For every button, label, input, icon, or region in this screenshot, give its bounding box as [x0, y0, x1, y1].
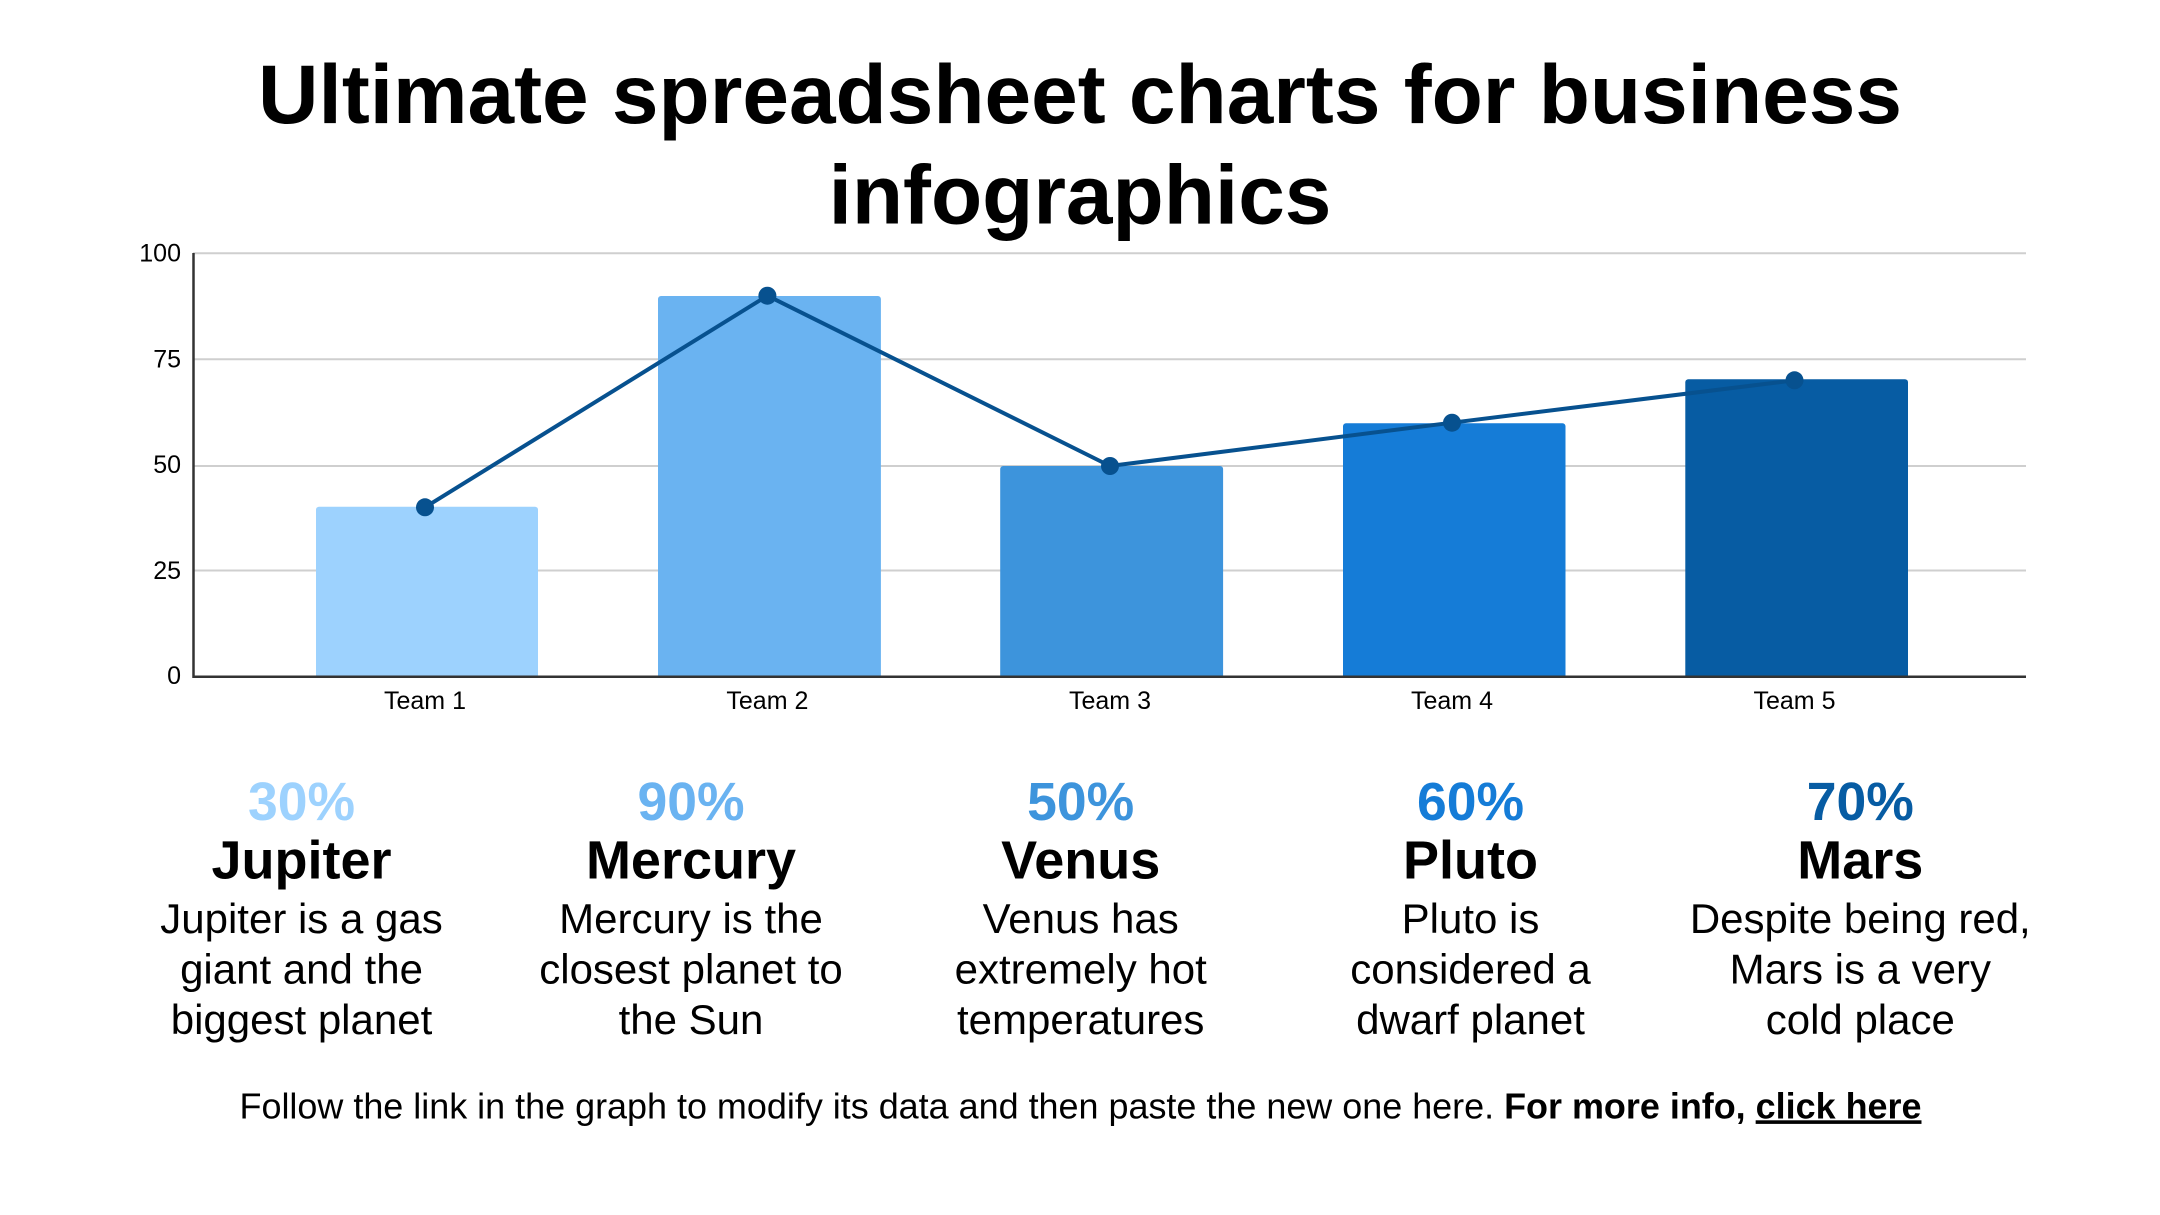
- panel: Mars: Despite being red,: [1690, 895, 2031, 942]
- panel: Mars: 70%: [1807, 773, 1914, 832]
- title: [258, 47, 1902, 242]
- bar: Team 5: [1685, 379, 1908, 677]
- panel: Venus: temperatures: [957, 996, 1204, 1043]
- bar: Team 2: [658, 296, 881, 677]
- axes: [194, 253, 2026, 677]
- panel: Mars: cold place: [1766, 996, 1955, 1043]
- panel: Pluto: considered a: [1350, 946, 1591, 992]
- title: infographics: [829, 148, 1331, 242]
- y axis labels: 0: [167, 662, 181, 690]
- panel: Pluto: [1350, 773, 1591, 1043]
- panel: Jupiter: Jupiter: [211, 830, 392, 890]
- x axis labels: Team 5: [1754, 687, 1835, 715]
- panel: Venus: extremely hot: [955, 946, 1207, 992]
- panel: Jupiter: Jupiter is a gas: [160, 895, 443, 942]
- y axis labels: 50: [153, 451, 181, 479]
- panel: Mercury: 90%: [637, 773, 745, 832]
- panel: Venus: Venus has: [983, 895, 1179, 942]
- panel: Mercury: Mercury: [586, 830, 796, 890]
- y axis labels: 100: [139, 240, 181, 268]
- bar: Team 4: [1343, 423, 1566, 677]
- panel: Jupiter: biggest planet: [171, 996, 433, 1043]
- panel: Mercury: closest planet to: [539, 946, 843, 992]
- x axis labels: [384, 687, 1835, 715]
- panel: Venus: 50%: [1027, 773, 1134, 832]
- panel: Venus: [955, 773, 1207, 1043]
- panel: Mars: [1690, 773, 2031, 1043]
- y axis labels: 25: [153, 557, 181, 585]
- panel: Pluto: dwarf planet: [1356, 996, 1585, 1043]
- combo chart: bars and line by team: [139, 240, 2026, 715]
- panel: Pluto: 60%: [1417, 773, 1524, 832]
- y axis labels: [139, 240, 181, 690]
- x axis labels: Team 3: [1069, 687, 1151, 715]
- x axis labels: Team 2: [726, 687, 808, 715]
- panel: Mars: Mars: [1797, 830, 1923, 890]
- trend line: [416, 287, 1804, 516]
- title: Ultimate spreadsheet charts for business: [258, 47, 1902, 141]
- x axis labels: Team 1: [384, 687, 466, 715]
- y axis labels: 75: [153, 345, 181, 373]
- panel: Jupiter: 30%: [248, 773, 355, 832]
- panel: Mercury: the Sun: [619, 996, 763, 1043]
- panel: Venus: Venus: [1001, 830, 1160, 890]
- panel: Jupiter: [160, 773, 443, 1043]
- bar: Team 1: [316, 507, 538, 677]
- x axis labels: Team 4: [1411, 687, 1493, 715]
- panel: Pluto: Pluto is: [1402, 895, 1539, 942]
- panel: Mars: Mars is a very: [1730, 946, 1991, 992]
- footer note: Follow the link in the graph to modify its data and then paste the new one here. For more info, click here: [240, 1085, 1921, 1126]
- panel: Jupiter: giant and the: [180, 946, 423, 992]
- panel: Mercury: [539, 773, 843, 1043]
- bar: Team 3: [1000, 466, 1223, 677]
- panel: Mercury: Mercury is the: [559, 895, 823, 942]
- panel: Pluto: Pluto: [1403, 830, 1538, 890]
